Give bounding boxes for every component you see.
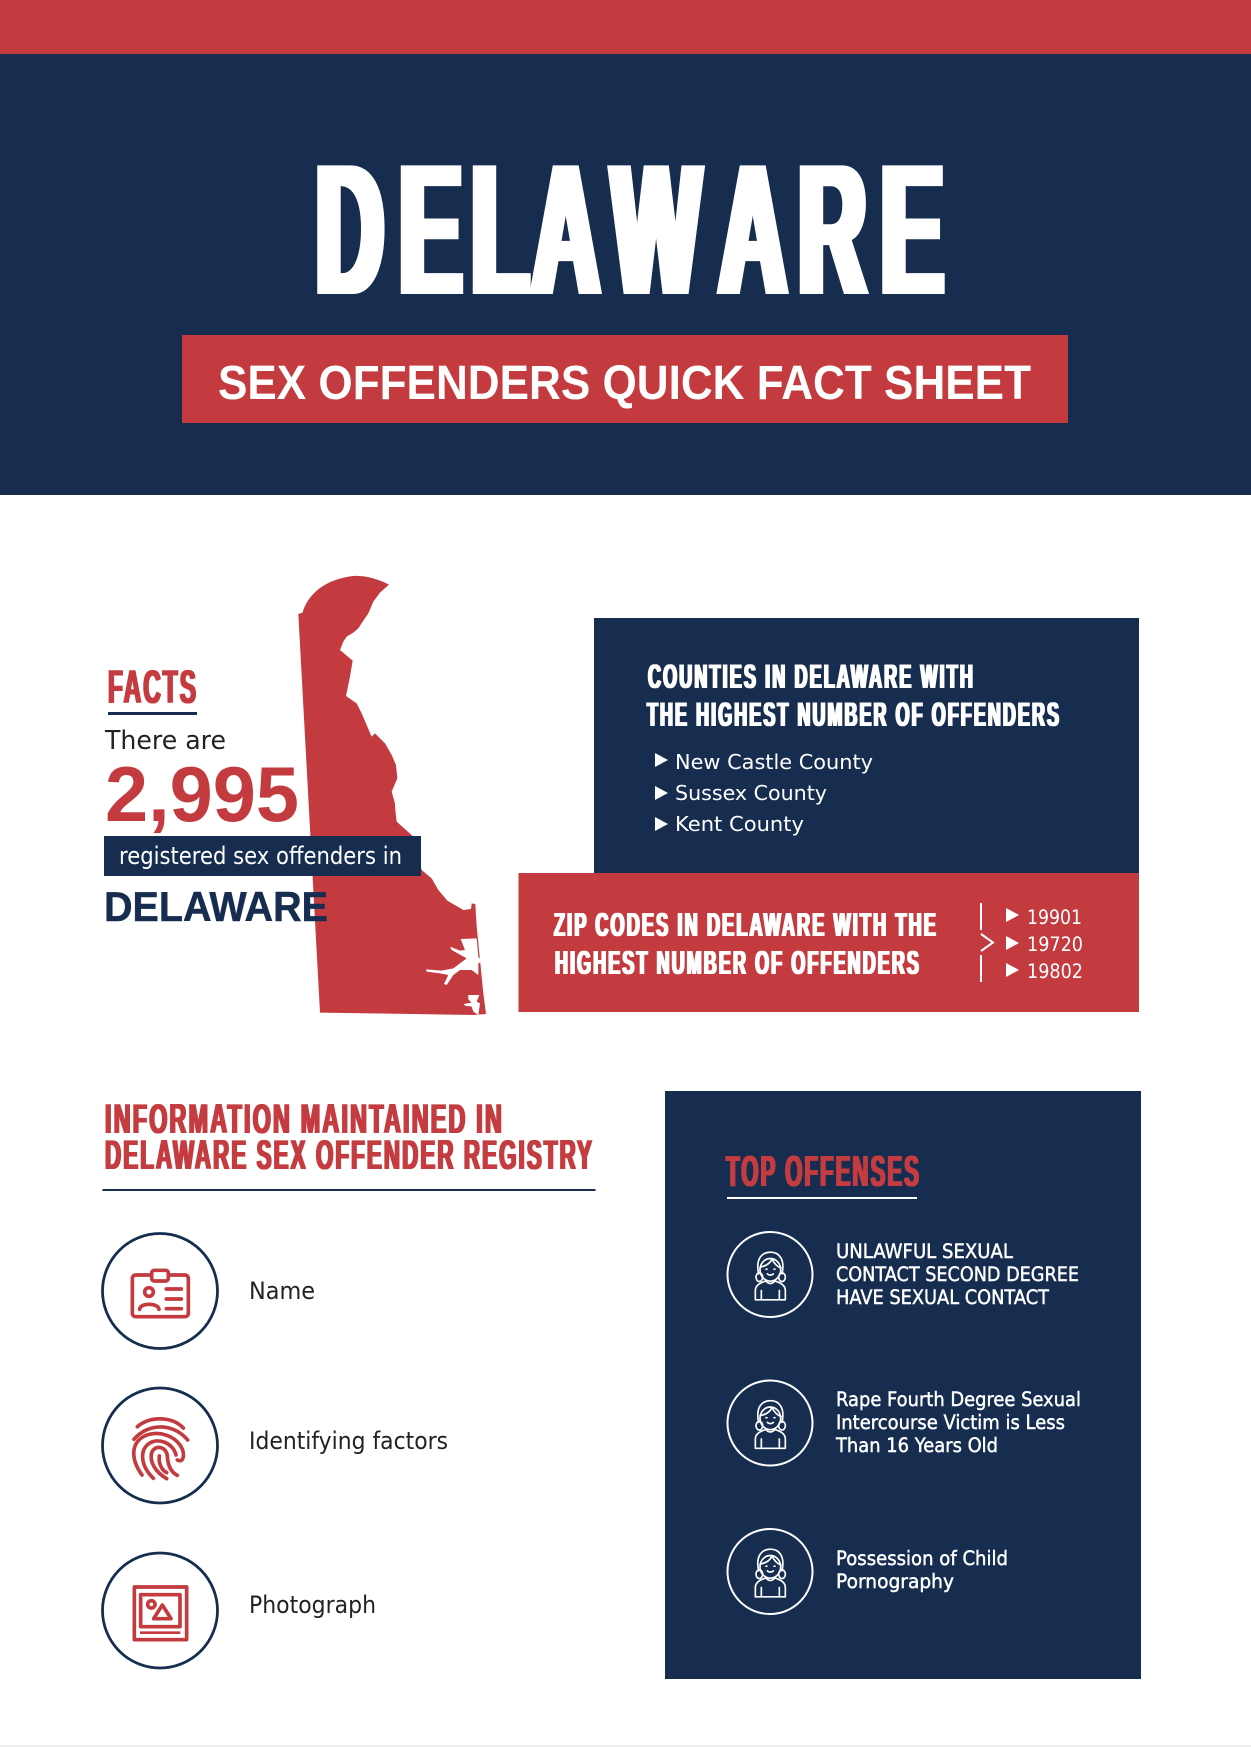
item: photograph <box>102 1553 376 1668</box>
counties list: Sussex County <box>675 781 827 805</box>
offenses heading: TOP OFFENSES <box>726 1147 921 1196</box>
panel: zip codes <box>518 873 1139 1012</box>
offense 2 text: Than 16 Years Old <box>835 1434 998 1457</box>
icon: photograph <box>102 1553 218 1668</box>
counties heading: COUNTIES IN DELAWARE WITH <box>648 658 975 696</box>
icon: id badge <box>102 1234 218 1348</box>
panel: facts <box>104 660 421 930</box>
label: name: Name <box>249 1277 315 1305</box>
zip heading: HIGHEST NUMBER OF OFFENDERS <box>555 945 921 982</box>
state name: DELAWARE <box>104 883 328 930</box>
registry heading: INFORMATION MAINTAINED IN <box>105 1095 504 1142</box>
heading rule <box>102 1189 596 1191</box>
offense 2 text: Intercourse Victim is Less <box>836 1411 1065 1434</box>
subtitle banner <box>182 335 1068 423</box>
icon: girl <box>728 1529 812 1614</box>
item: name <box>102 1234 315 1348</box>
facts heading: FACTS <box>108 660 198 713</box>
map: Delaware state silhouette <box>298 576 486 1015</box>
offense 1 text: HAVE SEXUAL CONTACT <box>836 1286 1049 1309</box>
registry heading <box>105 1095 594 1178</box>
navy label: registered sex offenders in <box>119 842 402 870</box>
offense 2 text <box>835 1388 1081 1457</box>
big number: 2,995 <box>105 750 299 838</box>
offense 1 <box>728 1232 1079 1317</box>
offense 2 text: Rape Fourth Degree Sexual <box>836 1388 1081 1411</box>
header panel <box>0 54 1251 495</box>
offense 1 text <box>836 1240 1079 1309</box>
lead text: There are <box>104 726 226 756</box>
label: photograph: Photograph <box>249 1591 376 1619</box>
icon: girl <box>728 1232 812 1317</box>
zip list <box>1006 906 1083 983</box>
zip list: 19802 <box>1027 960 1083 983</box>
item: identifying factors <box>102 1388 448 1503</box>
zip list: 19720 <box>1027 933 1083 956</box>
icon: girl <box>728 1380 812 1466</box>
panel: top offenses <box>665 1091 1141 1679</box>
zip list: 19901 <box>1027 906 1082 929</box>
top red band <box>0 0 1251 54</box>
offense 1 text: UNLAWFUL SEXUAL <box>836 1240 1013 1263</box>
panel: counties <box>594 618 1139 874</box>
zip heading: ZIP CODES IN DELAWARE WITH THE <box>554 907 938 944</box>
counties list: New Castle County <box>675 750 873 774</box>
icon: fingerprint <box>102 1388 218 1503</box>
navy label <box>104 836 421 876</box>
panel: registry information <box>102 1095 596 1668</box>
counties heading <box>647 658 1061 734</box>
offense 3 text <box>836 1547 1008 1593</box>
offense 3 <box>728 1529 1008 1614</box>
subtitle banner: SEX OFFENDERS QUICK FACT SHEET <box>218 357 1031 410</box>
label: identifying factors: Identifying factors <box>249 1427 448 1455</box>
offense 2 <box>728 1380 1081 1466</box>
counties list <box>655 750 873 836</box>
offense 3 text: Possession of Child <box>836 1547 1008 1570</box>
offense 3 text: Pornography <box>836 1570 954 1593</box>
bracket arrow <box>981 903 993 982</box>
counties list: Kent County <box>675 812 804 836</box>
registry heading: DELAWARE SEX OFFENDER REGISTRY <box>105 1131 594 1178</box>
title: DELAWARE <box>316 126 943 334</box>
offense 1 text: CONTACT SECOND DEGREE <box>836 1263 1079 1286</box>
facts underline <box>108 712 197 715</box>
zip heading <box>554 907 938 982</box>
offenses rule <box>727 1197 917 1199</box>
